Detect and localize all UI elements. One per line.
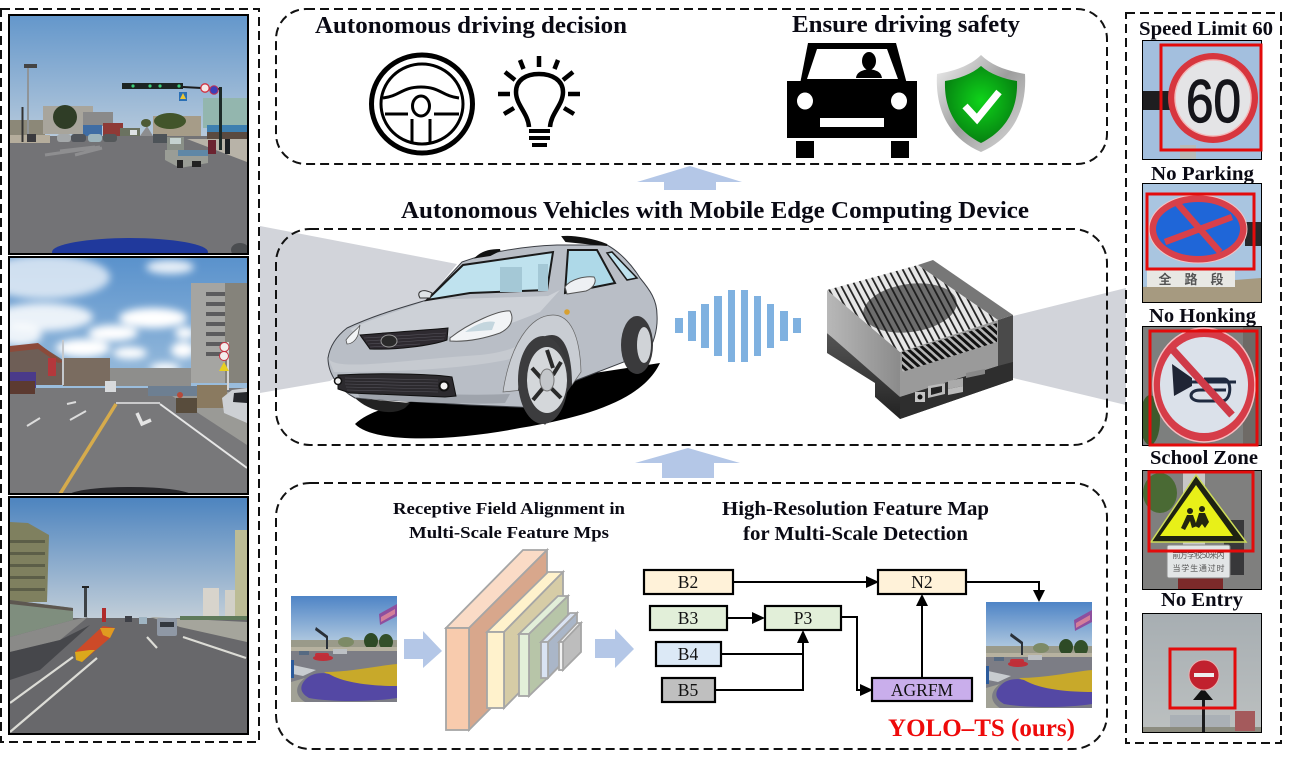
illustration: edge computing device — [827, 260, 1013, 419]
photo: elevated highway with barrier — [8, 496, 249, 735]
block: B4: B4 — [678, 644, 698, 664]
block: B4 — [656, 642, 721, 666]
projection beam: edge device to traffic signs — [1013, 288, 1126, 405]
panel: traffic sign examples — [1126, 13, 1281, 743]
heading: ensure driving safety: Ensure driving safety — [792, 12, 1020, 38]
label: school zone: School Zone — [1150, 447, 1258, 469]
block: B5: B5 — [678, 680, 698, 700]
sign: no entry — [1142, 613, 1262, 733]
block: B3: B3 — [678, 608, 698, 628]
diagram: multi-scale feature maps — [446, 550, 581, 730]
sign: speed limit 60 — [1142, 40, 1262, 160]
sign: school zone: 当学生通过时 — [1172, 563, 1224, 574]
icon: wireless signal bars — [675, 290, 801, 362]
illustration: silver car — [328, 237, 660, 438]
sign: no parking — [1142, 183, 1262, 303]
icon: steering wheel — [372, 55, 472, 153]
block: AGRFM: AGRFM — [891, 680, 954, 700]
photo: intersection with traffic lights — [8, 14, 249, 266]
sign: speed limit 60: 60 — [1186, 68, 1241, 135]
sign: school zone — [1142, 470, 1262, 590]
label: speed limit 60: Speed Limit 60 — [1139, 18, 1273, 40]
panel: road scene photos — [0, 9, 259, 742]
panel: YOLO-TS model — [276, 483, 1107, 749]
heading: autonomous driving decision: Autonomous driving decision — [315, 13, 627, 39]
projection beam: vehicle view — [260, 226, 457, 393]
label: YOLO-TS (ours): YOLO–TS (ours) — [888, 715, 1075, 742]
label: no parking: No Parking — [1151, 163, 1254, 185]
image: detection output scene — [986, 602, 1092, 708]
sign: no honking — [1140, 326, 1262, 446]
heading: high-resolution feature map — [722, 499, 989, 545]
arrow: backbone to detection neck — [595, 629, 634, 668]
heading: receptive field alignment: Receptive Field Alignment in — [393, 499, 626, 518]
diagram: detection flow — [644, 570, 1045, 702]
block: B3 — [650, 606, 727, 630]
arrow: up to decision panel — [637, 166, 742, 190]
label: no honking: No Honking — [1149, 305, 1256, 327]
block: N2: N2 — [911, 572, 933, 592]
heading: autonomous vehicles with mobile edge computing device: Autonomous Vehicles with Mobile Edge Computing Device — [401, 198, 1029, 224]
block: P3 — [765, 606, 841, 630]
heading: high-resolution feature map: High-Resolution Feature Map — [722, 499, 989, 520]
label: no entry: No Entry — [1161, 589, 1243, 611]
photo: street under cloudy sky — [0, 255, 249, 505]
icon: green security shield — [937, 55, 1025, 152]
block: N2 — [878, 570, 966, 594]
image: input scene — [291, 596, 397, 702]
icon: light bulb — [498, 56, 580, 145]
block: P3: P3 — [794, 608, 812, 628]
block: AGRFM — [872, 678, 972, 701]
block: B2: B2 — [678, 572, 698, 592]
heading: receptive field alignment: Multi-Scale Feature Mps — [409, 523, 609, 542]
arrow: up to vehicle panel — [635, 448, 740, 478]
heading: receptive field alignment — [393, 499, 626, 542]
block: B2 — [644, 570, 733, 594]
icon: car front with driver — [787, 43, 917, 158]
panel: driving decision and safety — [276, 9, 1107, 164]
arrow: input to backbone — [404, 631, 442, 668]
panel: vehicle and edge device — [276, 229, 1107, 445]
sign: no parking: 全路段 — [1158, 269, 1224, 288]
sign: school zone: 前方学校50米内 — [1172, 550, 1224, 561]
block: B5 — [662, 678, 715, 702]
heading: high-resolution feature map: for Multi-Scale Detection — [743, 524, 968, 545]
